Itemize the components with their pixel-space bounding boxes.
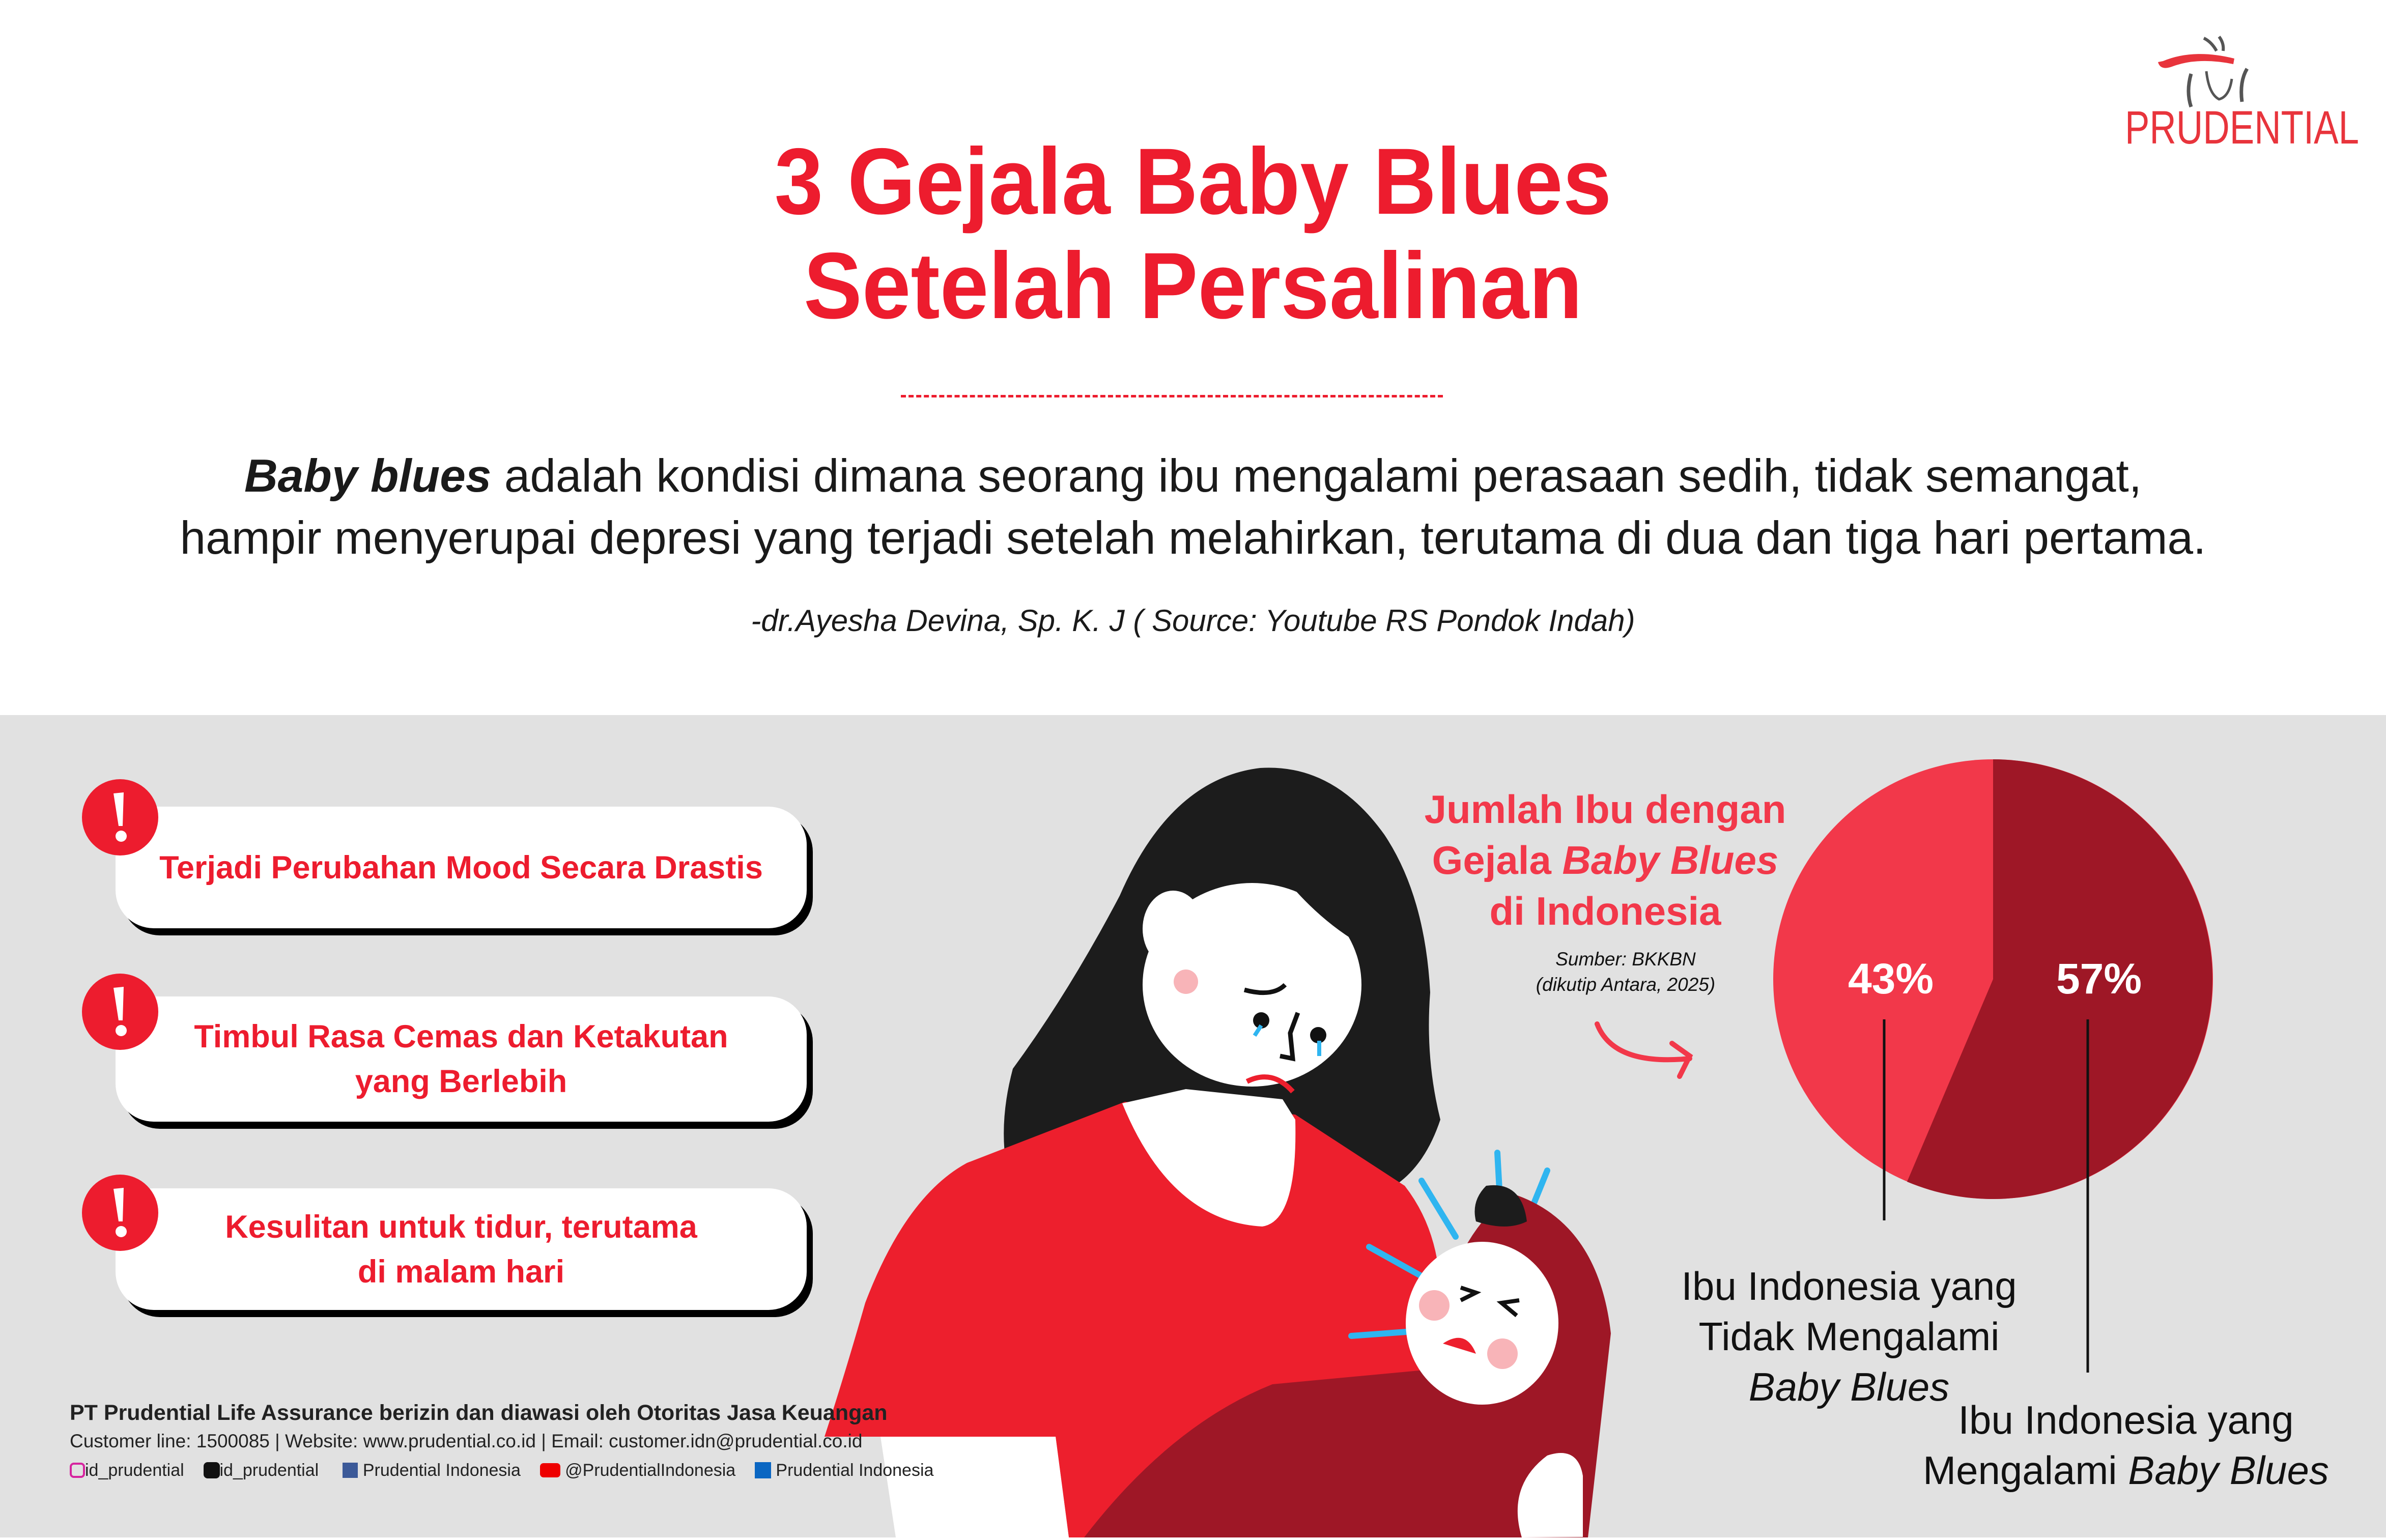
divider dashed: [901, 395, 1443, 397]
blue stress lines: [1351, 1153, 1547, 1336]
footer: [70, 1401, 933, 1480]
symptom card 1: Terjadi Perubahan Mood Secara Drastis: [159, 850, 763, 886]
pie chart: 43%: [1848, 955, 1934, 1003]
hair: [1004, 767, 1440, 1206]
arm white: [880, 1437, 1069, 1537]
label: not experiencing: Baby Blues: [1749, 1364, 1949, 1409]
label: experiencing: Ibu Indonesia yang: [1958, 1398, 2294, 1442]
neck: [1122, 1089, 1295, 1227]
face: [1143, 883, 1361, 1087]
icon: warning 1: [82, 779, 158, 855]
baby blanket: [1084, 1193, 1611, 1537]
intro paragraph: hampir menyerupai depresi yang terjadi setelah melahirkan, terutama di dua dan tiga hari pertama.: [180, 512, 2206, 564]
chart source: (dikutip Antara, 2025): [1536, 974, 1715, 995]
chart source: Sumber: BKKBN: [1555, 949, 1696, 969]
hand: [1518, 1453, 1583, 1537]
illustration: mother and crying baby: [825, 767, 1611, 1537]
shirt: [825, 1102, 1440, 1537]
label: not experiencing: Tidak Mengalami: [1698, 1314, 2000, 1359]
chart title: [1425, 787, 1786, 933]
intro paragraph: [180, 450, 2206, 564]
arrow to pie: [1595, 1021, 1693, 1079]
symptom card 3: [116, 1188, 807, 1310]
symptom card 2: Timbul Rasa Cemas dan Ketakutan: [194, 1019, 728, 1054]
gray panel: [0, 715, 2386, 1537]
label: not experiencing: Ibu Indonesia yang: [1681, 1264, 2017, 1308]
symptom card 2: yang Berlebih: [355, 1064, 567, 1099]
symptom card 3: di malam hari: [358, 1254, 564, 1290]
label: experiencing: [1923, 1398, 2329, 1493]
title: Setelah Persalinan: [804, 234, 1582, 338]
social icons row: id_prudential id_prudential Prudential Indonesia @PrudentialIndonesia Prudential Indonesia: [85, 1461, 933, 1480]
logo: prudential: [2125, 36, 2359, 153]
label: experiencing: Mengalami Baby Blues: [1923, 1448, 2329, 1493]
citation: -dr.Ayesha Devina, Sp. K. J ( Source: Youtube RS Pondok Indah): [751, 604, 1635, 638]
intro paragraph: Baby blues adalah kondisi dimana seorang ibu mengalami perasaan sedih, tidak semangat,: [244, 450, 2142, 502]
pie chart: [1773, 759, 2213, 1373]
chart title: Jumlah Ibu dengan: [1425, 787, 1786, 832]
footer: PT Prudential Life Assurance berizin dan diawasi oleh Otoritas Jasa Keuangan: [70, 1401, 888, 1425]
chart source: [1536, 949, 1715, 995]
title: 3 Gejala Baby Blues: [775, 129, 1611, 234]
symptom card 2: [116, 996, 807, 1122]
label: not experiencing: [1681, 1264, 2017, 1409]
baby face: [1406, 1242, 1558, 1405]
symptom card 3: Kesulitan untuk tidur, terutama: [225, 1209, 697, 1245]
pie chart: 57%: [2056, 955, 2142, 1003]
chart title: di Indonesia: [1489, 889, 1721, 933]
symptom card 1: [116, 807, 807, 928]
title: [775, 129, 1611, 338]
icon: warning 2: [82, 974, 158, 1050]
chart title: Gejala Baby Blues: [1432, 838, 1778, 882]
icon: warning 3: [82, 1175, 158, 1251]
footer: Customer line: 1500085 | Website: www.prudential.co.id | Email: customer.idn@prudential.co.id: [70, 1431, 862, 1451]
